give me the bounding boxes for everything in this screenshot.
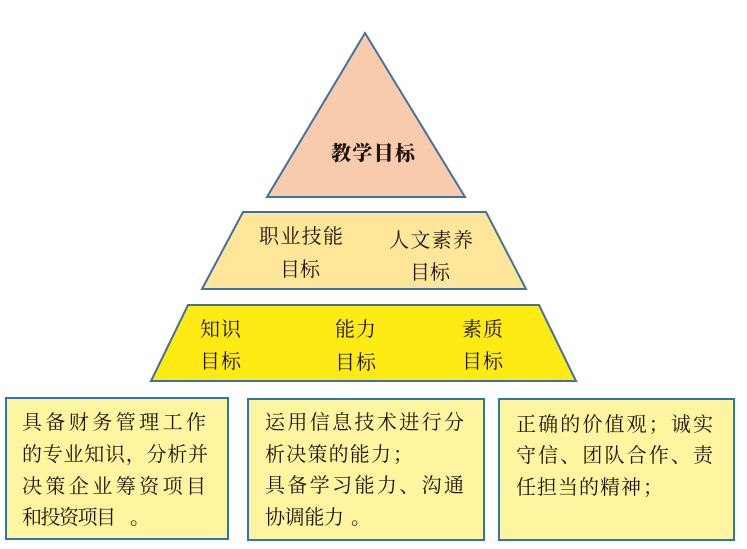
panel: top triangle teaching goal bbox=[267, 33, 465, 197]
text: quality description: 正确的价值观；诚实 bbox=[516, 408, 713, 437]
text: knowledge description: 的专业知识，分析并 bbox=[22, 438, 208, 467]
heading: teaching goal: 教学目标 bbox=[331, 137, 417, 166]
text: knowledge description: 决策企业筹资项目 bbox=[22, 470, 206, 499]
panel: middle trapezoid bbox=[202, 212, 526, 289]
panel: ability box bbox=[248, 399, 484, 540]
text: ability goal: 目标 bbox=[335, 346, 377, 375]
text: knowledge description: 具备财务管理工作 bbox=[22, 406, 206, 435]
text: humanities goal: 人文素养 bbox=[389, 224, 473, 253]
text: knowledge goal: 目标 bbox=[200, 345, 242, 374]
text: quality description: 任担当的精神 bbox=[516, 471, 641, 500]
text: vocational skill goal: 目标 bbox=[280, 253, 321, 282]
text: knowledge description: 。 bbox=[130, 501, 150, 530]
panel: quality box bbox=[499, 399, 734, 540]
text: ability description: 析决策的能力 bbox=[265, 438, 391, 467]
text: knowledge goal: 知识 bbox=[200, 313, 242, 342]
text: knowledge description: 和投资项目 bbox=[22, 501, 116, 530]
text: quality goal: 目标 bbox=[462, 345, 504, 374]
text: ability goal: 能力 bbox=[335, 313, 376, 342]
text: humanities goal: 目标 bbox=[410, 256, 451, 285]
text: ability description: 运用信息技术进行分 bbox=[265, 406, 464, 435]
text: quality goal: 素质 bbox=[462, 313, 503, 342]
panel: knowledge box bbox=[6, 398, 228, 539]
text: ability description: 。 bbox=[351, 501, 371, 530]
text: ability description: 具备学习能力、沟通 bbox=[265, 469, 464, 498]
text: ability description: 协调能力 bbox=[265, 501, 344, 530]
text: quality description: ； bbox=[643, 471, 663, 500]
text: ability description: ； bbox=[393, 438, 413, 467]
text: vocational skill goal: 职业技能 bbox=[259, 220, 343, 249]
text: quality description: 守信、团队合作、责 bbox=[516, 439, 714, 468]
panel: bottom trapezoid bbox=[151, 305, 576, 381]
